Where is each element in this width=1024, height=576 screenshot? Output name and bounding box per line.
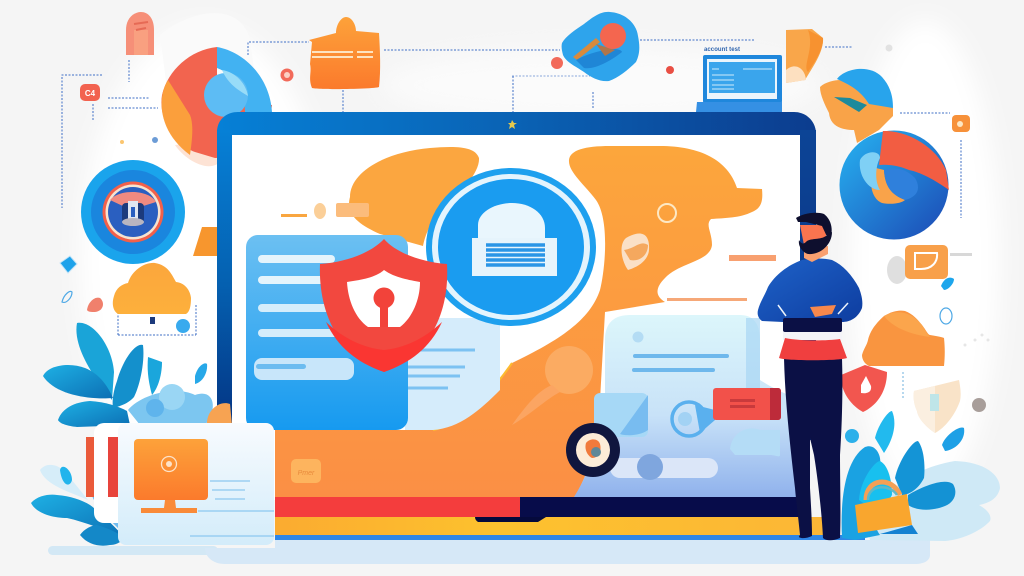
left lower plants — [31, 465, 125, 546]
icon: mini monitor: account test — [704, 47, 740, 53]
base stripes — [275, 497, 865, 540]
screen: blue document panel — [246, 235, 408, 430]
legs — [784, 358, 842, 540]
icon: pie chart — [161, 47, 272, 166]
icon: small red dots top — [551, 57, 674, 74]
icon: left target circle — [81, 160, 185, 264]
icon: orange tile behind frame — [193, 227, 218, 256]
laptop screen — [232, 135, 800, 500]
camera star — [508, 120, 517, 129]
icon: faint right glyph — [940, 308, 952, 324]
screen: red shield — [320, 239, 447, 372]
right dotted speck — [964, 334, 990, 346]
ground shadow — [48, 540, 930, 564]
icon: red badge: C4 — [85, 89, 96, 98]
screen: pale panel behind shield — [405, 318, 500, 430]
icon: person head with cap — [820, 69, 893, 143]
left plants — [43, 323, 232, 427]
icon: right small tiles — [886, 44, 970, 132]
left card stack — [86, 423, 274, 545]
connector lines — [62, 40, 961, 335]
screen: upper left orange blob — [349, 147, 479, 246]
head — [804, 246, 828, 262]
icon: right cloud — [862, 311, 945, 400]
screen: pale message area — [574, 315, 797, 497]
icon: orange tile right — [887, 245, 972, 290]
right foliage — [842, 411, 1000, 541]
screen: lock circle — [426, 168, 596, 326]
orange monitor — [134, 439, 208, 513]
icon: globe — [840, 130, 949, 240]
icon: cream shield — [914, 380, 986, 433]
icon: small left marks — [60, 137, 190, 333]
icon: red badge — [80, 84, 100, 101]
icon: orange fragment — [786, 29, 823, 83]
shirt — [758, 258, 862, 322]
icon: orange tag — [309, 17, 380, 89]
screen: large orange shape — [275, 146, 762, 497]
icon: blue blob with magnifier — [562, 12, 639, 81]
laptop — [217, 112, 865, 540]
screen: large orange shape: Pmer — [298, 470, 315, 477]
icon: mini monitor — [696, 47, 782, 112]
icon: small red shield — [841, 365, 887, 412]
icon: left cloud — [113, 263, 191, 314]
laptop frame — [217, 112, 816, 440]
person — [758, 213, 862, 540]
icon: small red dot left — [280, 68, 294, 82]
screen: dark app badge — [566, 423, 620, 477]
icon: coral tab — [126, 12, 154, 55]
screen: red button — [713, 388, 781, 420]
screen: small labels — [281, 203, 776, 301]
icon: orange bag — [855, 482, 918, 534]
